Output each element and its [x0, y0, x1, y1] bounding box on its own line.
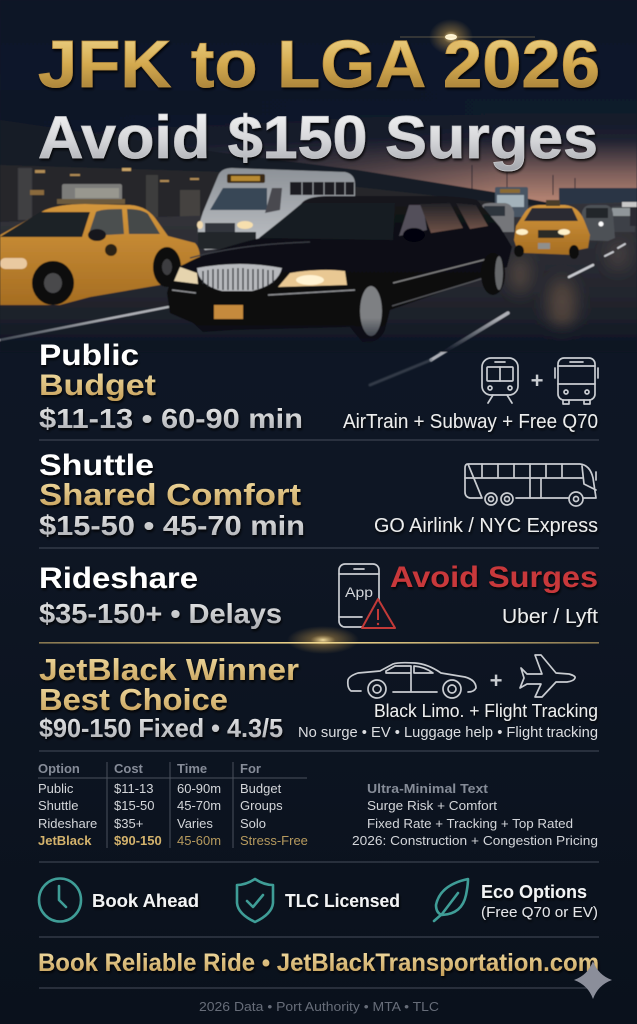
title glint	[400, 19, 535, 55]
avoid surges warning: Avoid Surges	[390, 561, 598, 594]
badge: tlc licensed: TLC Licensed	[285, 891, 400, 911]
icon: airplane	[520, 655, 575, 697]
title line 1: JFK to LGA 2026	[38, 27, 600, 102]
row: shuttle: Shuttle	[38, 798, 78, 813]
left taxi	[0, 184, 200, 305]
title line 2: Avoid $150 Surges	[38, 104, 598, 171]
right taxi	[514, 200, 590, 259]
chrome trim	[393, 257, 495, 283]
panel: rideshare	[39, 561, 598, 629]
shuttle tag: Shared Comfort	[39, 477, 301, 512]
jetblack heading: JetBlack Winner	[39, 652, 299, 687]
windshield	[259, 203, 395, 240]
badge: eco options: Eco Options	[481, 882, 587, 902]
icon: sparkle	[574, 961, 612, 999]
shuttle heading: Shuttle	[39, 449, 154, 482]
icon: limo	[348, 663, 476, 698]
terminal building	[0, 120, 560, 240]
jetblack price and rating: $90-150 Fixed • 4.3/5	[39, 713, 283, 743]
hero photo: airport road scene	[0, 0, 637, 360]
row: jetblack: JetBlack	[38, 833, 92, 848]
icon: phone app	[339, 564, 379, 627]
sky at dusk	[0, 0, 637, 225]
table header: Cost	[114, 761, 144, 776]
shuttle price and time: $15-50 • 45-70 min	[39, 510, 305, 541]
source footer: 2026 Data • Port Authority • MTA • TLC	[199, 999, 439, 1014]
distant traffic	[480, 187, 637, 241]
row: jetblack: $90-150	[114, 833, 162, 848]
icon: warning	[362, 599, 395, 628]
jetblack tag: Best Choice	[39, 682, 228, 717]
icon: leaf	[434, 879, 468, 921]
badge: eco options: (Free Q70 or EV)	[481, 904, 598, 921]
row: jetblack: 45-60m	[177, 833, 221, 848]
row: shuttle: $15-50	[114, 798, 154, 813]
row: jetblack: Stress-Free	[240, 833, 308, 848]
icon: bus	[555, 358, 598, 404]
rideshare services: Uber / Lyft	[502, 606, 598, 628]
row: rideshare: Rideshare	[38, 816, 97, 831]
note lines: Fixed Rate + Tracking + Top Rated	[367, 816, 573, 831]
table header: For	[240, 761, 261, 776]
icon: clock	[39, 878, 81, 922]
lane markings	[0, 244, 625, 360]
rideshare price: $35-150+ • Delays	[39, 598, 282, 629]
far buildings	[559, 188, 637, 205]
panel: public transit	[39, 339, 598, 434]
public heading: Public	[39, 339, 139, 372]
row: public: Budget	[240, 781, 282, 796]
public services: AirTrain + Subway + Free Q70	[343, 411, 598, 433]
jetblack features: No surge • EV • Luggage help • Flight tracking	[298, 725, 598, 741]
call to action: Book Reliable Ride • JetBlackTransportation.com	[38, 949, 599, 977]
fade to panel	[0, 318, 637, 352]
comparison table	[38, 761, 308, 848]
panel: shuttle	[39, 449, 598, 541]
icon: coach	[465, 464, 596, 506]
side windows	[399, 205, 427, 236]
row: rideshare	[38, 816, 266, 831]
wheels	[353, 277, 385, 343]
wet reflections	[510, 240, 628, 331]
public tag: Budget	[39, 369, 156, 402]
row: jetblack	[38, 833, 308, 848]
road streak behind panel	[370, 360, 431, 385]
shuttle services: GO Airlink / NYC Express	[374, 515, 598, 537]
table header: Option	[38, 761, 80, 776]
badges row	[39, 878, 598, 922]
note heading: Ultra-Minimal Text	[367, 781, 489, 796]
row: public: 60-90m	[177, 781, 221, 796]
row: public	[38, 781, 282, 796]
row: public: Public	[38, 781, 74, 796]
black limousine	[167, 196, 512, 343]
note lines	[352, 798, 598, 848]
shuttle bus	[197, 168, 355, 250]
license plate	[214, 305, 243, 319]
light poles	[472, 165, 575, 195]
hood highlights	[190, 242, 310, 258]
badge: eco options	[481, 882, 598, 921]
note lines: Surge Risk + Comfort	[367, 798, 497, 813]
row: rideshare: $35+	[114, 816, 143, 831]
icon: phone app: App	[345, 584, 373, 600]
road	[0, 202, 637, 350]
icon: plus: +	[531, 368, 543, 393]
badge: book ahead: Book Ahead	[92, 891, 199, 911]
panel: jetblack winner	[39, 652, 598, 743]
minimal notes	[352, 781, 598, 848]
row: shuttle	[38, 798, 283, 813]
row: shuttle: Groups	[240, 798, 283, 813]
public price and time: $11-13 • 60-90 min	[39, 403, 303, 434]
grille	[197, 264, 282, 291]
row: shuttle: 45-70m	[177, 798, 221, 813]
row: public: $11-13	[114, 781, 154, 796]
row: rideshare: Solo	[240, 816, 266, 831]
icon: train	[482, 358, 518, 403]
gold divider with glow	[39, 626, 599, 654]
note lines: 2026: Construction + Congestion Pricing	[352, 833, 598, 848]
table header: Time	[177, 761, 207, 776]
icon: shield	[237, 879, 273, 922]
jetblack services: Black Limo. + Flight Tracking	[374, 701, 598, 721]
table header	[38, 761, 261, 776]
row: rideshare: Varies	[177, 816, 213, 831]
icon: plus: +	[490, 668, 502, 693]
rideshare heading: Rideshare	[39, 562, 198, 595]
headlights	[174, 267, 198, 284]
